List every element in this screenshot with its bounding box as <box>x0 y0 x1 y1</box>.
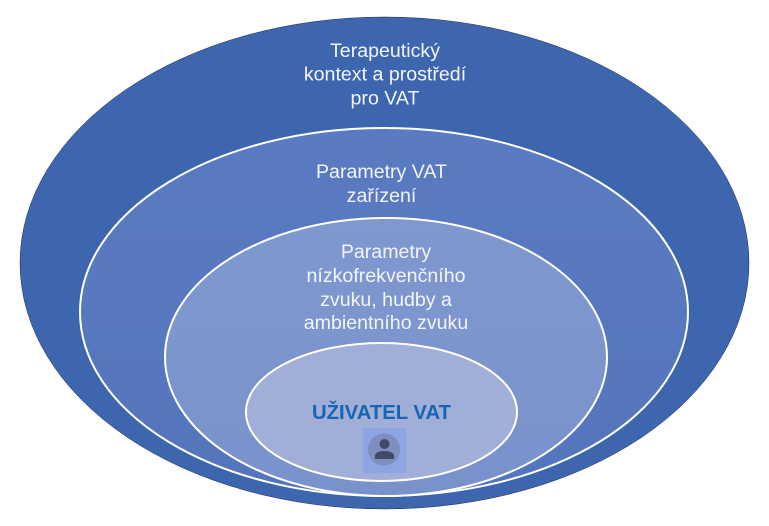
icon: user avatar <box>363 428 406 473</box>
panel: third ellipse, sound parameters <box>165 218 607 496</box>
text: therapeutic context: Terapeutický <box>330 40 440 62</box>
panel: inner ellipse, VAT user <box>246 343 517 481</box>
text: VAT device parameters: zařízení <box>347 185 417 207</box>
text: sound parameters: zvuku, hudby a <box>320 289 452 311</box>
text: therapeutic context: pro VAT <box>351 88 420 110</box>
heading: VAT user: UŽIVATEL VAT <box>312 400 452 424</box>
text: therapeutic context: kontext a prostředí <box>304 64 467 86</box>
text: VAT device parameters: Parametry VAT <box>316 161 447 183</box>
text: sound parameters: Parametry <box>341 241 431 263</box>
panel: second ellipse, VAT device parameters <box>80 128 688 496</box>
text: sound parameters: ambientního zvuku <box>304 312 468 334</box>
text: sound parameters: nízkofrekvenčního <box>306 265 466 287</box>
